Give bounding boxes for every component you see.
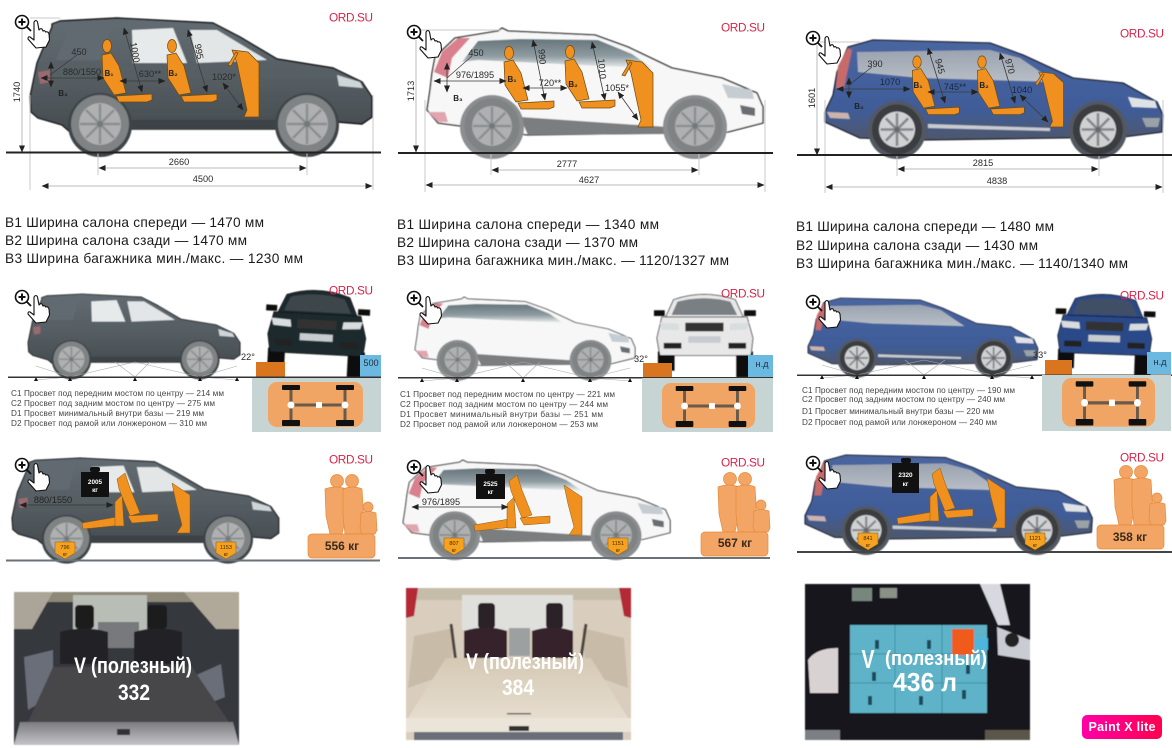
cargo length — [412, 497, 508, 507]
text block: column 1 cabin widths: В2 Ширина салона сзади — 1470 мм — [5, 233, 247, 248]
dimension numbers: 1040 — [1012, 85, 1032, 95]
text block: column 2 cabin widths: В2 Ширина салона сзади — 1370 мм — [397, 235, 638, 250]
watermark: ORD.SU — [721, 456, 765, 470]
folded seats — [82, 473, 190, 533]
panel: column 1 dimensions car — [6, 10, 381, 190]
text block: column 3 cabin widths: В1 Ширина салона спереди — 1480 мм — [796, 219, 1054, 234]
text block: column 2 cabin widths — [397, 217, 729, 268]
payload people: 567 кг — [718, 536, 752, 550]
weight icon: 2525 — [483, 481, 498, 488]
photo: trunk 1 with volume 332 — [14, 592, 239, 745]
panel: column 3 clearance — [797, 288, 1172, 431]
icon: zoom hand — [408, 460, 442, 493]
folded seats — [474, 475, 582, 535]
axle load rear: кг — [866, 543, 870, 549]
text block: column 3 cabin widths: В3 Ширина багажника мин./макс. — 1140/1340 мм — [796, 256, 1128, 271]
axle load front: кг — [616, 548, 620, 554]
clearance text: С1 Просвет под передним мостом по центру — 214 мм — [11, 389, 224, 398]
dimension numbers: 1000 — [128, 42, 142, 63]
volume label — [862, 644, 987, 697]
car side view small — [415, 297, 635, 381]
dimension numbers — [406, 48, 629, 185]
obstacle block — [256, 362, 285, 377]
dimension numbers: 995 — [193, 43, 205, 60]
watermark: ORD.SU — [1120, 288, 1164, 302]
cargo length: 880/1550 — [34, 495, 72, 505]
axle load rear: кг — [63, 552, 67, 558]
photo: trunk 3 with volume 436 — [805, 584, 1030, 740]
dimension numbers: 1020* — [212, 72, 236, 82]
weight icon: кг — [903, 481, 909, 488]
underbody plan panel — [642, 378, 773, 432]
dimension numbers: 390 — [867, 59, 883, 69]
icon: zoom hand — [408, 26, 442, 58]
trunk interior with blue blocks — [805, 584, 1030, 740]
dimension numbers — [807, 58, 1032, 186]
interior seats and dashboard — [504, 46, 653, 127]
icon: zoom hand — [806, 32, 840, 64]
car side view: dark SUV — [30, 18, 372, 157]
payload people — [701, 472, 770, 556]
icon: zoom hand — [16, 458, 50, 491]
axle load front — [608, 538, 628, 555]
badge: Paint X lite — [1082, 715, 1162, 739]
dimension numbers: 4627 — [579, 175, 599, 185]
dimension numbers: 970 — [1003, 58, 1017, 75]
dimension numbers: B₃ — [854, 102, 864, 111]
dimension numbers: B₂ — [568, 80, 578, 89]
ground line — [8, 376, 381, 378]
water depth — [1147, 352, 1171, 374]
axle load rear — [858, 533, 878, 550]
watermark: ORD.SU — [329, 452, 373, 466]
dimension numbers: 1713 — [406, 81, 416, 101]
watermark: ORD.SU — [721, 20, 765, 34]
axle load front: 1151 — [612, 541, 624, 547]
watermark: ORD.SU — [1120, 450, 1164, 464]
ground line — [797, 551, 1172, 553]
dimension numbers — [12, 42, 236, 184]
dimension numbers: 1070 — [880, 77, 900, 87]
axle load rear: 841 — [863, 536, 873, 542]
water depth: 500 — [363, 358, 379, 368]
clearance text: С2 Просвет под задним мостом по центру — 244 мм — [400, 400, 608, 409]
dimension lines — [22, 18, 373, 190]
ground line — [6, 152, 381, 154]
volume label: 384 — [502, 675, 535, 700]
dimension numbers: 1740 — [12, 82, 22, 102]
volume label: (полезный) — [885, 648, 987, 670]
car side view: blue wagon — [825, 40, 1163, 159]
car side view small — [28, 294, 240, 379]
text block: column 3 cabin widths — [796, 219, 1128, 271]
car side view: white SUV — [427, 28, 763, 159]
panel: column 3 load — [797, 450, 1172, 555]
ground line — [398, 152, 773, 154]
clearance text: D2 Просвет под рамой или лонжероном — 310 мм — [11, 419, 207, 428]
text block: column 2 cabin widths: В1 Ширина салона спереди — 1340 мм — [397, 217, 659, 232]
ground line — [797, 154, 1172, 156]
icon: zoom hand — [16, 16, 50, 48]
cargo length — [20, 495, 113, 505]
clearance text — [11, 389, 224, 428]
folded seats — [897, 468, 1005, 528]
car side view medium — [403, 460, 670, 560]
axle load front: кг — [1033, 543, 1037, 549]
weight icon — [81, 467, 109, 497]
dimension numbers: 4838 — [987, 176, 1007, 186]
badge: Paint X lite: Paint X lite — [1088, 720, 1156, 734]
dimension numbers: 720** — [539, 78, 562, 88]
watermark: ORD.SU — [329, 284, 373, 298]
payload people: 358 кг — [1113, 530, 1147, 544]
clearance text: С1 Просвет под передним мостом по центру — 190 мм — [802, 386, 1015, 395]
volume label: V (полезный) — [74, 653, 192, 678]
panel: column 2 dimensions car — [398, 20, 773, 192]
clearance text — [400, 390, 615, 429]
watermark: ORD.SU — [329, 10, 373, 24]
panel: column 2 load — [398, 456, 770, 560]
dimension numbers: 976/1895 — [456, 70, 494, 80]
clearance text: С1 Просвет под передним мостом по центру — 221 мм — [400, 390, 615, 399]
ground line — [398, 557, 770, 559]
dimension numbers: B₃ — [453, 94, 463, 103]
trunk interior drawing — [14, 592, 239, 745]
dimension numbers: 4500 — [193, 174, 213, 184]
interior seats and dashboard — [912, 56, 1064, 127]
dimension numbers: 2777 — [557, 159, 577, 169]
text block: column 2 cabin widths: В3 Ширина багажника мин./макс. — 1120/1327 мм — [397, 253, 729, 268]
dimension numbers: 745** — [944, 82, 967, 92]
volume label: 332 — [118, 680, 150, 705]
ground line — [6, 560, 380, 562]
underbody plan panel — [252, 378, 381, 432]
axle load front — [1025, 533, 1045, 550]
axle load front: 1153 — [220, 545, 232, 551]
dimension numbers: 945 — [933, 58, 947, 75]
ground line — [398, 377, 773, 378]
obstacle block — [643, 363, 672, 377]
clearance text: D1 Просвет минимальный внутри базы — 220 мм — [802, 407, 994, 416]
dimension numbers: 2660 — [169, 157, 189, 167]
front view car on obstacle — [263, 288, 371, 380]
dimension numbers: B₂ — [979, 81, 989, 90]
icon: zoom hand — [806, 296, 840, 328]
icon: zoom hand — [16, 290, 50, 323]
axle load front: 1121 — [1029, 536, 1041, 542]
clearance text — [802, 386, 1015, 427]
weight icon: кг — [92, 487, 98, 494]
dimension numbers: B₂ — [168, 69, 178, 78]
weight icon: 2320 — [898, 472, 913, 479]
weight icon — [892, 458, 919, 493]
volume label: V — [862, 644, 875, 674]
obstacle block — [1045, 360, 1072, 375]
car side view medium — [805, 455, 1092, 555]
panel: column 1 load — [6, 452, 380, 564]
payload people — [308, 474, 377, 558]
dimension numbers: 1055* — [605, 83, 629, 93]
clearance markers: 22° — [241, 352, 255, 362]
dimension lines — [817, 42, 1163, 193]
water depth: н.д — [756, 359, 769, 369]
trunk interior drawing — [406, 588, 631, 740]
watermark: ORD.SU — [1120, 26, 1164, 40]
clearance text: D2 Просвет под рамой или лонжероном — 240 мм — [802, 418, 997, 427]
interior seats and dashboard — [102, 40, 259, 117]
dimension numbers: B₁ — [913, 81, 923, 90]
front view car on obstacle — [654, 294, 756, 377]
axle load rear — [444, 538, 464, 555]
text block: column 1 cabin widths: В1 Ширина салона спереди — 1470 мм — [5, 215, 264, 230]
weight icon: 2005 — [88, 479, 103, 486]
payload people: 556 кг — [325, 539, 359, 553]
dimension numbers: 450 — [468, 48, 484, 58]
cargo length: 976/1895 — [422, 497, 460, 507]
clearance markers — [34, 352, 255, 381]
weight icon: кг — [488, 489, 494, 496]
dimension lines — [416, 30, 765, 192]
dimension numbers: 880/1550 — [63, 67, 101, 77]
axle load front: кг — [224, 552, 228, 558]
volume label: V (полезный) — [466, 649, 584, 674]
dimension numbers: 2815 — [973, 158, 993, 168]
clearance text: С2 Просвет под задним мостом по центру — 275 мм — [11, 399, 215, 408]
axle load rear: 807 — [449, 541, 459, 547]
front view car on obstacle — [1053, 293, 1156, 377]
clearance text: D2 Просвет под рамой или лонжероном — 253 мм — [400, 420, 598, 429]
weight icon — [476, 469, 505, 499]
axle load front — [216, 542, 236, 559]
clearance text: D1 Просвет минимальный внутри базы — 251 мм — [400, 410, 603, 419]
clearance text: D1 Просвет минимальный внутри базы — 219 мм — [11, 409, 204, 418]
axle load rear — [55, 542, 75, 559]
icon: zoom hand — [806, 456, 840, 489]
clearance markers — [820, 350, 1047, 379]
dimension numbers: 1601 — [807, 88, 817, 108]
panel: column 1 clearance — [8, 284, 381, 432]
axle load rear: 796 — [60, 545, 70, 551]
text block: column 1 cabin widths — [5, 215, 303, 266]
icon: zoom hand — [408, 292, 442, 324]
dimension numbers: B₃ — [58, 89, 68, 98]
ground line — [797, 374, 1172, 376]
clearance markers — [420, 354, 648, 382]
panel: column 3 dimensions car — [797, 26, 1172, 193]
water depth: н.д — [1154, 357, 1167, 367]
photo: trunk 2 with volume 384 — [406, 588, 631, 740]
text block: column 3 cabin widths: В2 Ширина салона сзади — 1430 мм — [796, 238, 1038, 253]
volume label — [74, 653, 192, 705]
car side view medium — [12, 458, 279, 564]
watermark: ORD.SU — [721, 286, 765, 300]
water depth — [360, 355, 381, 377]
clearance text: С2 Просвет под задним мостом по центру — 240 мм — [802, 395, 1005, 404]
dimension numbers: 990 — [536, 49, 548, 65]
volume label: 436 л — [893, 667, 957, 697]
volume label — [466, 649, 584, 700]
panel: column 2 clearance — [398, 286, 773, 432]
dimension numbers: 450 — [71, 47, 87, 57]
axle load rear: кг — [452, 548, 456, 554]
dimension numbers: B₁ — [507, 75, 517, 84]
clearance markers: 32° — [634, 354, 648, 364]
underbody plan panel — [1042, 375, 1171, 431]
text block: column 1 cabin widths: В3 Ширина багажника мин./макс. — 1230 мм — [5, 251, 303, 266]
dimension numbers: 1010 — [596, 58, 608, 79]
dimension numbers: 630** — [139, 69, 162, 79]
water depth — [748, 355, 773, 377]
clearance markers: 33° — [1033, 350, 1047, 360]
dimension numbers: B₁ — [104, 69, 114, 78]
payload people — [1097, 466, 1166, 549]
car side view small — [808, 298, 1038, 378]
